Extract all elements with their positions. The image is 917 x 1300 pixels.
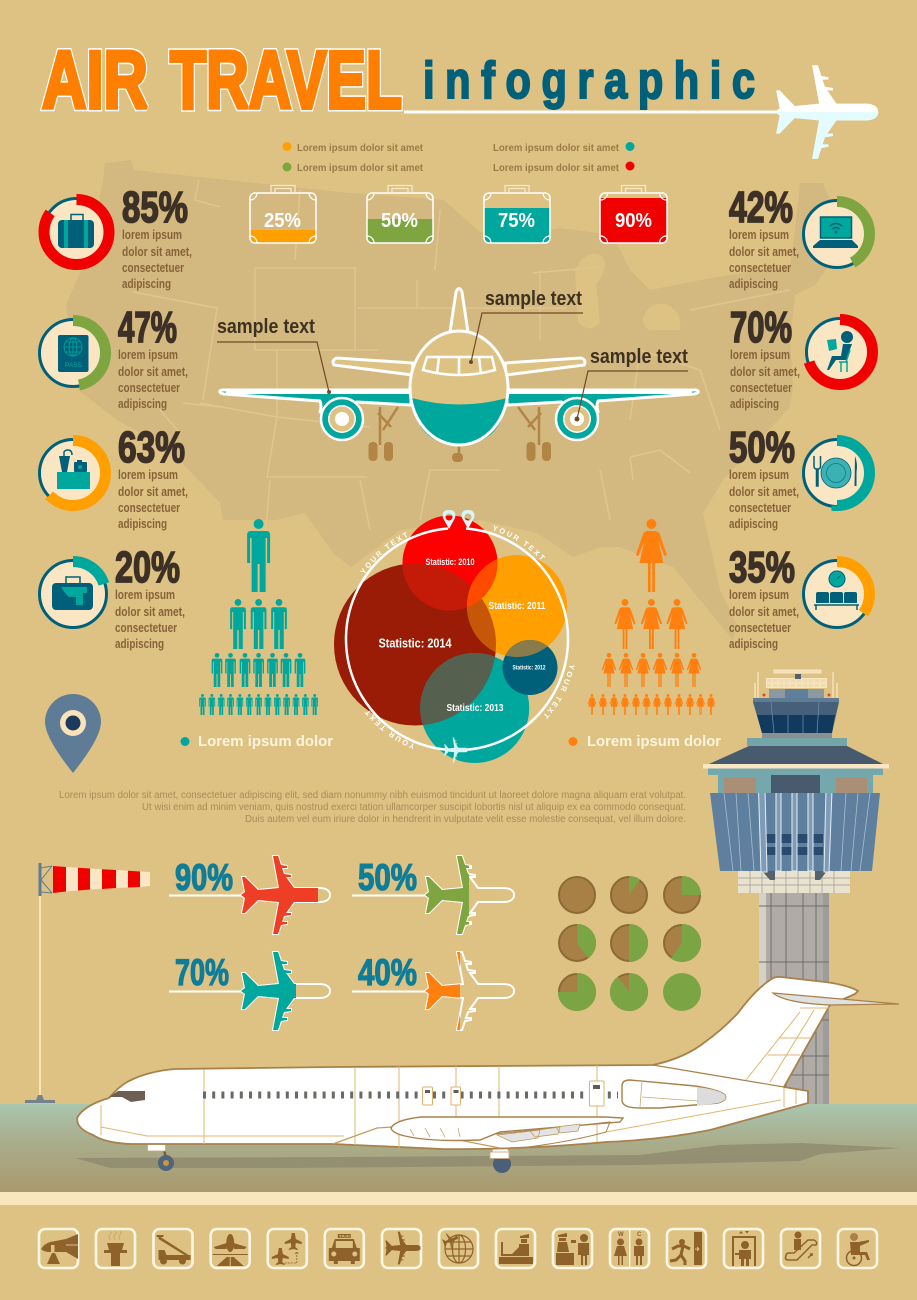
- legend: [282, 142, 634, 174]
- overlaps: [402, 559, 548, 725]
- lower deck: [738, 871, 850, 893]
- ring labels: YOUR TEXT: [494, 525, 546, 560]
- icon: wheelchair: [838, 1229, 877, 1268]
- stat: 70% reading: [730, 303, 874, 411]
- suitcase gauges: [250, 186, 667, 243]
- ground: [0, 1104, 917, 1205]
- icon: suitcase: [58, 214, 94, 248]
- icon: restrooms: [610, 1229, 649, 1268]
- pie 10%: [611, 877, 647, 913]
- plane gauge 70%: 70%: [175, 952, 229, 993]
- pyramid legend left: Lorem ipsum dolor: [198, 733, 333, 750]
- icon: taxi: TAXI: [339, 1234, 350, 1238]
- statistic labels: Statistic: 2011: [488, 601, 546, 612]
- icon: taxi: [325, 1229, 364, 1268]
- stat: 50% dining: dolor sit amet,: [729, 484, 799, 499]
- stat: 42% wifi: consectetuer: [729, 260, 791, 275]
- rear engine: [622, 1080, 726, 1108]
- callout: sample text left: [217, 316, 331, 394]
- title: AIR TRAVEL: AIR: [42, 35, 148, 126]
- icon: suitcase with gun: [52, 577, 93, 610]
- icon: passport: [58, 335, 88, 372]
- stat: 50% dining: adipiscing: [729, 516, 778, 531]
- callout: sample text right: sample text: [590, 346, 688, 368]
- pie 0%: [559, 877, 595, 913]
- engine right: [556, 398, 598, 440]
- pie 90%: [611, 974, 647, 1010]
- stat: 63% shopping: lorem ipsum: [118, 467, 178, 482]
- stat: 47% passport: consectetuer: [118, 380, 180, 395]
- runway stripe: [0, 1192, 917, 1205]
- panel lines: [101, 1008, 830, 1148]
- outer ring: [346, 528, 568, 750]
- paragraph: Ut wisi enim ad minim veniam, quis nostrud exerci tation ullamcorper suscipit lobortis nisl ut aliquip ex ea commodo consequat.: [142, 802, 686, 813]
- cab: [753, 689, 839, 738]
- stat: 63% shopping: dolor sit amet,: [118, 484, 188, 499]
- icon: location pin: [45, 694, 101, 773]
- stat: 47% passport: adipiscing: [118, 396, 167, 411]
- suitcase 75%: [484, 186, 550, 243]
- stat: 20% security: 20%: [115, 543, 180, 592]
- pie 25%: [664, 877, 700, 913]
- horizontal stabilizer: [773, 993, 899, 1005]
- belly fairing and wing: [333, 1117, 623, 1148]
- stat: 42% wifi: 42%: [729, 183, 793, 232]
- paragraph: [59, 790, 686, 825]
- doors: [422, 1081, 604, 1106]
- stat: 35% waiting lounge: 35%: [729, 543, 795, 592]
- stat: 42% wifi: lorem ipsum: [729, 227, 789, 242]
- icon: header plane: [775, 65, 878, 159]
- engine left: [321, 398, 363, 440]
- statistic labels: Statistic: 2014: [378, 636, 452, 650]
- stat: 20% security: consectetuer: [115, 620, 177, 635]
- plane gauge 90%: [169, 856, 330, 934]
- icon: escalator: [781, 1229, 820, 1268]
- side view airliner: [77, 977, 899, 1173]
- plane gauge 70%: [169, 952, 330, 1030]
- stat: 20% security: dolor sit amet,: [115, 604, 185, 619]
- suitcase 75%: 75%: [498, 210, 535, 232]
- stat: 20% security: lorem ipsum: [115, 587, 175, 602]
- stat: 42% wifi: [729, 183, 871, 291]
- front view airplane: [220, 288, 698, 462]
- title underline: [404, 110, 784, 114]
- icon: globe and plane: [439, 1229, 478, 1268]
- icon: stairs truck: [154, 1229, 192, 1268]
- stat: 70% reading: lorem ipsum: [730, 347, 790, 362]
- icon: restrooms: C: [637, 1232, 642, 1238]
- male pyramid: [199, 519, 318, 715]
- icon: check-in agent: [496, 1229, 535, 1268]
- stat: 35% waiting lounge: [729, 543, 871, 651]
- stat: 85% luggage: dolor sit amet,: [122, 244, 192, 259]
- icon: elevator: [724, 1229, 763, 1268]
- passenger windows: [203, 1092, 618, 1098]
- bubble: 2011: [467, 555, 567, 657]
- stabilizers: [333, 358, 585, 375]
- pie grid: [559, 877, 701, 1011]
- bubble: 2013: [420, 653, 529, 763]
- icon: laptop: [813, 217, 858, 248]
- stat: 63% shopping: 63%: [118, 423, 185, 472]
- stat: 85% luggage: [42, 183, 192, 291]
- title: AIR TRAVEL: [42, 35, 402, 126]
- stat: 70% reading: 70%: [730, 303, 792, 352]
- tail fin: [450, 288, 468, 332]
- suitcase 50%: [367, 186, 433, 243]
- ring labels: YOUR TEXT: [544, 665, 575, 719]
- stat: 70% reading: adipiscing: [730, 396, 779, 411]
- callout: sample text top: sample text: [485, 288, 582, 310]
- stat: 85% luggage: adipiscing: [122, 276, 171, 291]
- stat: 35% waiting lounge: lorem ipsum: [729, 587, 789, 602]
- stat: 70% reading: dolor sit amet,: [730, 364, 800, 379]
- plane gauge 90%: 90%: [175, 857, 233, 898]
- suitcase 90%: 90%: [615, 210, 652, 232]
- icon: seated reader: [827, 331, 853, 372]
- main gear: [489, 1139, 511, 1173]
- stat: 63% shopping: [39, 423, 188, 531]
- subtitle: infographic: infographic: [423, 51, 755, 109]
- fuselage and fin: [77, 977, 858, 1149]
- title: AIR TRAVEL: TRAVEL: [170, 35, 402, 126]
- title: AIR TRAVEL: AIR: [42, 35, 148, 126]
- stat: 42% wifi: adipiscing: [729, 276, 778, 291]
- pie 50%: [611, 925, 647, 961]
- bubble: 2010: [402, 516, 498, 610]
- icon: passport control: [553, 1229, 592, 1268]
- icon: clock and seats: [814, 571, 859, 610]
- pie 40%: [559, 925, 595, 961]
- icon: exit: [667, 1229, 706, 1268]
- ring labels: [360, 525, 575, 750]
- suitcase 25%: [250, 186, 316, 243]
- stat: 50% dining: [729, 423, 871, 531]
- stat: 85% luggage: consectetuer: [122, 260, 184, 275]
- ring labels: YOUR TEXT: [360, 532, 407, 574]
- nose gear: [148, 1143, 174, 1171]
- stat: 47% passport: [39, 303, 188, 411]
- icon: plane on runway: [211, 1229, 250, 1268]
- plane gauge 40%: 40%: [358, 952, 417, 993]
- paragraph: Duis autem vel eum iriure dolor in hendrerit in vulputate velit esse molestie consequat, vel illum dolore.: [245, 814, 686, 825]
- map of the USA: [66, 160, 847, 640]
- control tower: [703, 670, 889, 1104]
- small plane on ring: [444, 738, 468, 762]
- title: AIR TRAVEL: TRAVEL: [170, 35, 402, 126]
- venn bubble chart: [334, 510, 575, 763]
- main body: [710, 790, 880, 872]
- legend: Lorem ipsum dolor sit amet: [493, 142, 619, 154]
- bubble: 2012: [502, 640, 558, 695]
- stat: 50% dining: consectetuer: [729, 500, 791, 515]
- legend: Lorem ipsum dolor sit amet: [297, 142, 423, 154]
- pie 100%: [663, 973, 701, 1011]
- pie 60%: [664, 925, 700, 961]
- statistic labels: Statistic: 2010: [426, 557, 474, 567]
- cockpit window: [109, 1091, 145, 1102]
- location pins: [443, 510, 474, 529]
- stat: 42% wifi: dolor sit amet,: [729, 244, 799, 259]
- ring labels: YOUR TEXT: [364, 710, 414, 750]
- icon: passport: PASS: [65, 363, 82, 369]
- landing gear: [368, 407, 551, 462]
- statistic labels: Statistic: 2012: [512, 664, 546, 672]
- callout: sample text right: [574, 346, 688, 422]
- stat: 47% passport: dolor sit amet,: [118, 364, 188, 379]
- tower column: [759, 893, 829, 1104]
- female pyramid: [588, 519, 715, 715]
- windsock: [25, 863, 150, 1103]
- gallery: [718, 775, 873, 793]
- paragraph: Lorem ipsum dolor sit amet, consectetuer adipiscing elit, sed diam nonummy nibh euismod tincidunt ut laoreet dolore magna aliquam erat volutpat.: [59, 790, 686, 801]
- pie 75%: [559, 974, 595, 1010]
- stat: 63% shopping: consectetuer: [118, 500, 180, 515]
- plane gauge 50%: 50%: [358, 857, 417, 898]
- icon: jet bridge: [39, 1229, 78, 1268]
- plane gauge 50%: [352, 856, 514, 934]
- suitcase 50%: 50%: [381, 210, 418, 232]
- legend: Lorem ipsum dolor sit amet: [493, 162, 619, 174]
- stat: 63% shopping: adipiscing: [118, 516, 167, 531]
- stat: 20% security: [39, 543, 185, 651]
- cockpit windows: [423, 357, 495, 376]
- statistic labels: Statistic: 2013: [446, 703, 504, 714]
- icon row: [39, 1229, 877, 1268]
- icon: restrooms: W: [618, 1232, 624, 1238]
- suitcase 90%: [600, 186, 667, 243]
- fuselage: [410, 331, 508, 445]
- stat: 85% luggage: 85%: [122, 183, 188, 232]
- suitcase 25%: 25%: [264, 210, 301, 232]
- bubble: 2014: [334, 564, 496, 726]
- pyramid legend right: Lorem ipsum dolor: [587, 733, 721, 750]
- icon: bag with umbrella and camera: [57, 450, 90, 489]
- callout: sample text top: [469, 288, 583, 364]
- legend: Lorem ipsum dolor sit amet: [297, 162, 423, 174]
- icon: flight connection: [268, 1229, 307, 1268]
- icon: plate and cutlery: [814, 456, 857, 488]
- stat: 35% waiting lounge: adipiscing: [729, 636, 778, 651]
- roof: [703, 738, 889, 775]
- stat: 20% security: adipiscing: [115, 636, 164, 651]
- stat: 35% waiting lounge: consectetuer: [729, 620, 791, 635]
- icon: airplane: [382, 1229, 421, 1268]
- stat: 47% passport: 47%: [118, 303, 177, 352]
- wings: [220, 390, 698, 412]
- callout: sample text left: sample text: [217, 316, 315, 338]
- plane gauge 40%: [352, 952, 514, 1030]
- statistic labels: [378, 557, 546, 714]
- runway shadow: [75, 1143, 900, 1168]
- stat: 35% waiting lounge: dolor sit amet,: [729, 604, 799, 619]
- stat: 85% luggage: lorem ipsum: [122, 227, 182, 242]
- stat: 70% reading: consectetuer: [730, 380, 792, 395]
- stat: 50% dining: 50%: [729, 423, 795, 472]
- stat: 50% dining: lorem ipsum: [729, 467, 789, 482]
- stat: 47% passport: lorem ipsum: [118, 347, 178, 362]
- icon: control tower: [96, 1229, 135, 1268]
- rooftop railing and antennas: [755, 670, 837, 698]
